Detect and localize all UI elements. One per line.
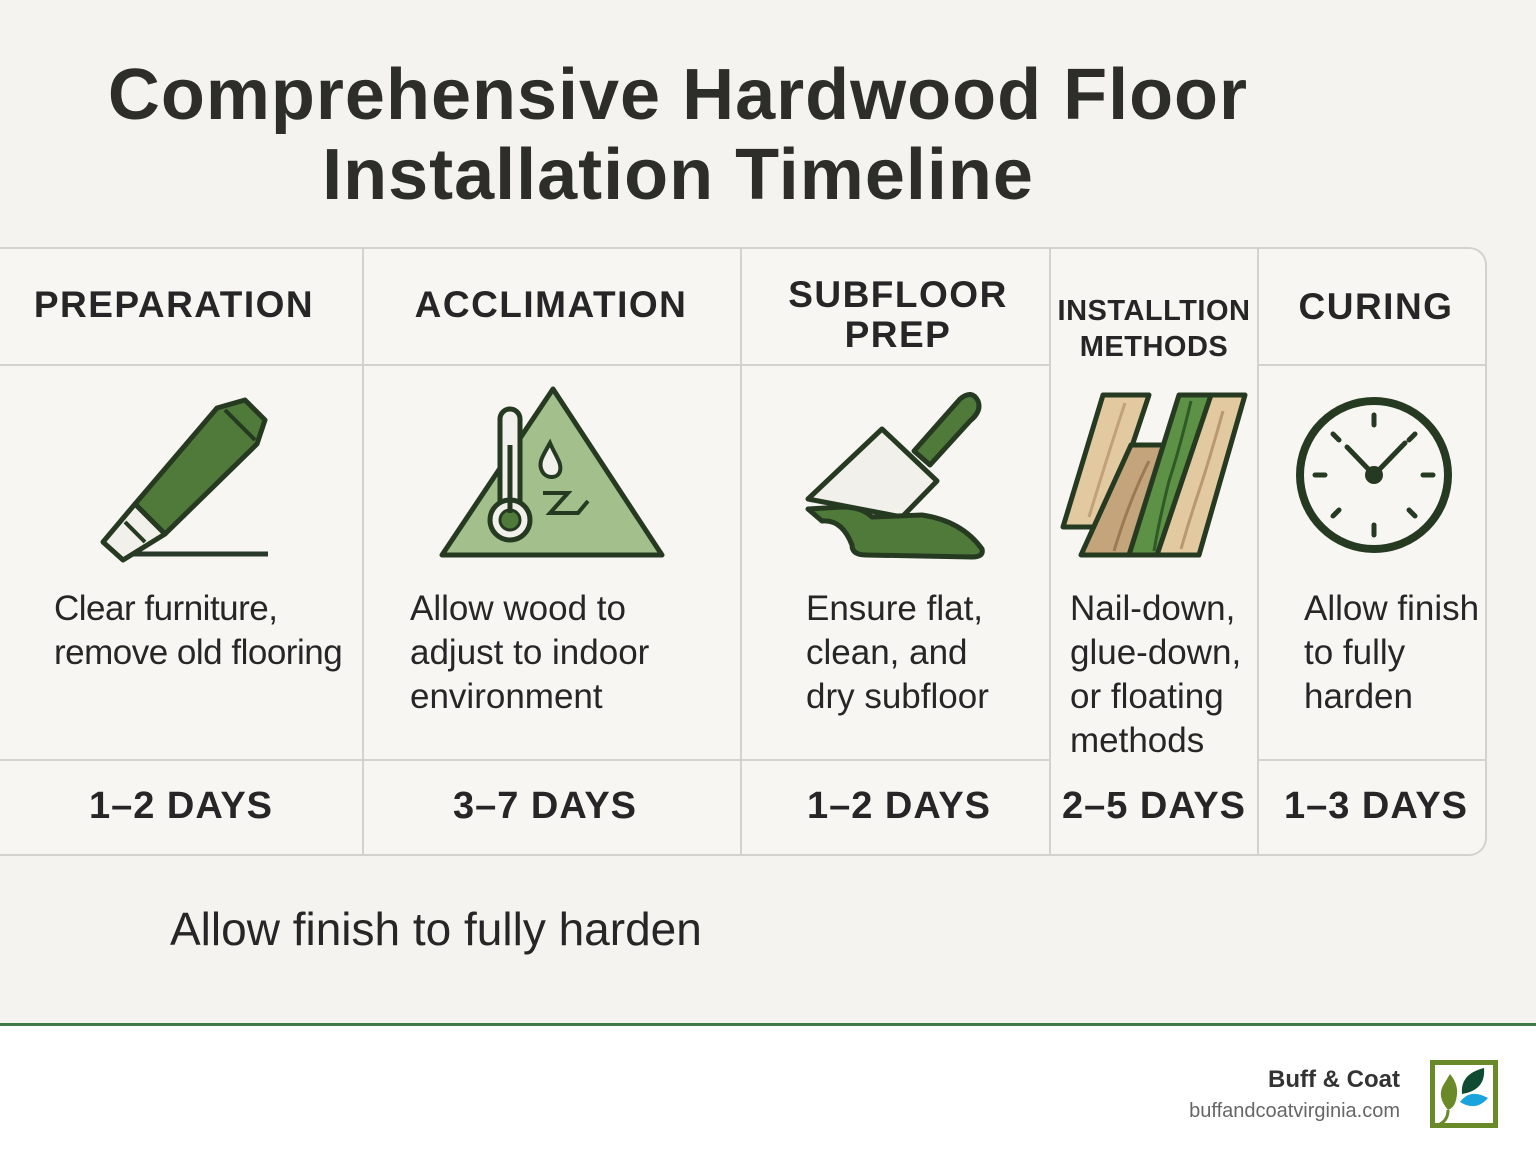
- brand url: buffandcoatvirginia.com: [1189, 1100, 1400, 1122]
- heading: subfloor prep: PREP: [845, 314, 951, 355]
- heading: preparation: PREPARATION: [34, 284, 314, 325]
- heading: installation methods: METHODS: [1080, 331, 1228, 363]
- column: preparation: [34, 284, 342, 827]
- heading: acclimation: ACCLIMATION: [415, 284, 687, 325]
- title: Installation Timeline: [322, 135, 1034, 215]
- description: acclimation: [410, 589, 649, 716]
- description: subfloor prep: dry subfloor: [806, 677, 989, 716]
- description: installation methods: [1070, 589, 1241, 760]
- description: subfloor prep: Ensure flat,: [806, 589, 983, 628]
- description: preparation: [54, 589, 342, 672]
- icon: utility knife: [100, 398, 268, 562]
- description: preparation: Clear furniture,: [54, 589, 277, 628]
- duration: curing: 1–3 DAYS: [1284, 785, 1468, 827]
- icon: thermometer triangle: [440, 386, 664, 558]
- timeline table: [0, 247, 1487, 856]
- description: installation methods: methods: [1070, 721, 1204, 760]
- duration: installation methods: 2–5 DAYS: [1062, 785, 1246, 827]
- icon: trowel: [806, 392, 985, 560]
- description: acclimation: adjust to indoor: [410, 633, 649, 672]
- description: acclimation: Allow wood to: [410, 589, 626, 628]
- heading: installation methods: [1058, 295, 1250, 363]
- heading: subfloor prep: SUBFLOOR: [788, 274, 1008, 315]
- column: installation methods: [1058, 295, 1250, 827]
- footer: [0, 1023, 1536, 1154]
- description: curing: harden: [1304, 677, 1413, 716]
- description: preparation: remove old flooring: [54, 633, 342, 672]
- heading: curing: CURING: [1299, 286, 1453, 327]
- description: installation methods: or floating: [1070, 677, 1224, 716]
- column: curing: [1284, 286, 1479, 827]
- column: subfloor prep: [788, 274, 1008, 827]
- description: installation methods: Nail-down,: [1070, 589, 1235, 628]
- description: acclimation: environment: [410, 677, 603, 716]
- duration: preparation: 1–2 DAYS: [89, 785, 273, 827]
- title: Comprehensive Hardwood Floor: [108, 55, 1248, 135]
- description: curing: Allow finish: [1304, 589, 1479, 628]
- logo: [1430, 1060, 1498, 1128]
- brand name: Buff & Coat: [1268, 1066, 1400, 1093]
- column: acclimation: [410, 284, 687, 827]
- heading: installation methods: INSTALLTION: [1058, 295, 1250, 327]
- heading: subfloor prep: [788, 274, 1008, 355]
- caption: Allow finish to fully harden: [170, 903, 702, 955]
- icon: clock: [1296, 397, 1452, 553]
- title: [108, 55, 1248, 215]
- description: subfloor prep: [806, 589, 989, 716]
- description: installation methods: glue-down,: [1070, 633, 1241, 672]
- description: subfloor prep: clean, and: [806, 633, 968, 672]
- description: curing: [1304, 589, 1479, 716]
- duration: subfloor prep: 1–2 DAYS: [807, 785, 991, 827]
- duration: acclimation: 3–7 DAYS: [453, 785, 637, 827]
- description: curing: to fully: [1304, 633, 1405, 672]
- icon: wood planks: [1060, 392, 1248, 558]
